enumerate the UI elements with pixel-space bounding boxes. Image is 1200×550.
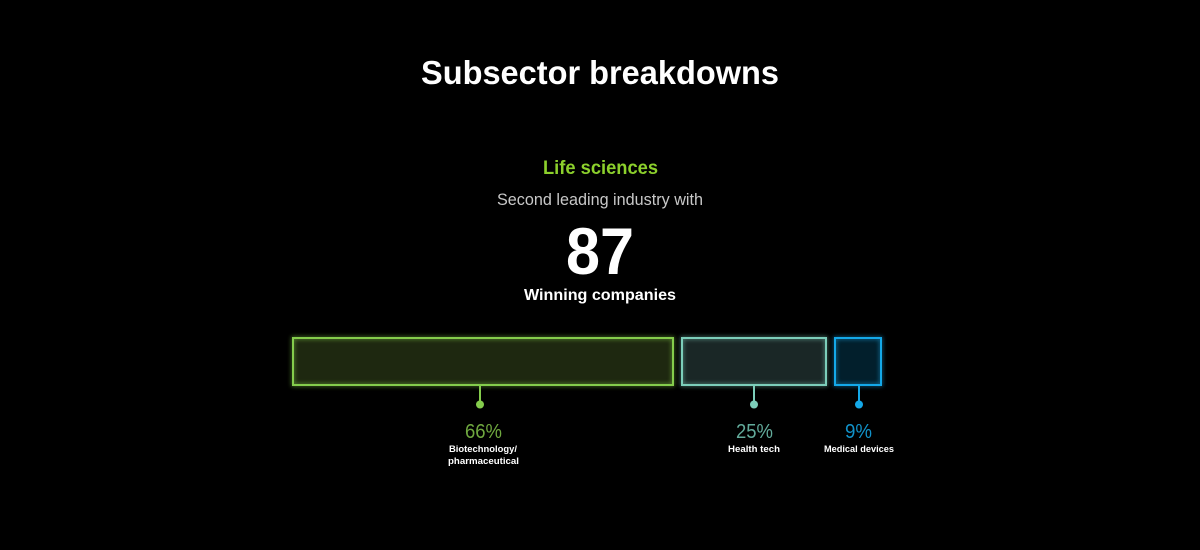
subheading: Second leading industry with xyxy=(497,190,703,209)
big number: 87 xyxy=(566,214,634,288)
leader: medical devices xyxy=(855,386,863,408)
heading: life sciences: Life sciences xyxy=(543,158,658,179)
value: 25%: 25% xyxy=(736,421,773,443)
label: biotechnology/pharmaceutical xyxy=(448,444,519,467)
segment: medical devices bar xyxy=(835,338,881,385)
leader: health tech xyxy=(750,386,758,408)
value: 9%: 9% xyxy=(845,421,872,443)
title: Subsector breakdowns xyxy=(421,54,779,91)
leader: biotechnology xyxy=(476,386,484,408)
value: 66%: 66% xyxy=(465,421,502,443)
caption: winning companies: Winning companies xyxy=(524,287,676,304)
label: medical devices: Medical devices xyxy=(824,444,894,455)
label: biotechnology/pharmaceutical: pharmaceutical xyxy=(448,456,519,467)
label: biotechnology/pharmaceutical: Biotechnology/ xyxy=(449,444,517,455)
segment: health tech bar xyxy=(682,338,826,385)
segment: biotechnology bar xyxy=(293,338,673,385)
label: health tech: Health tech xyxy=(728,444,780,455)
